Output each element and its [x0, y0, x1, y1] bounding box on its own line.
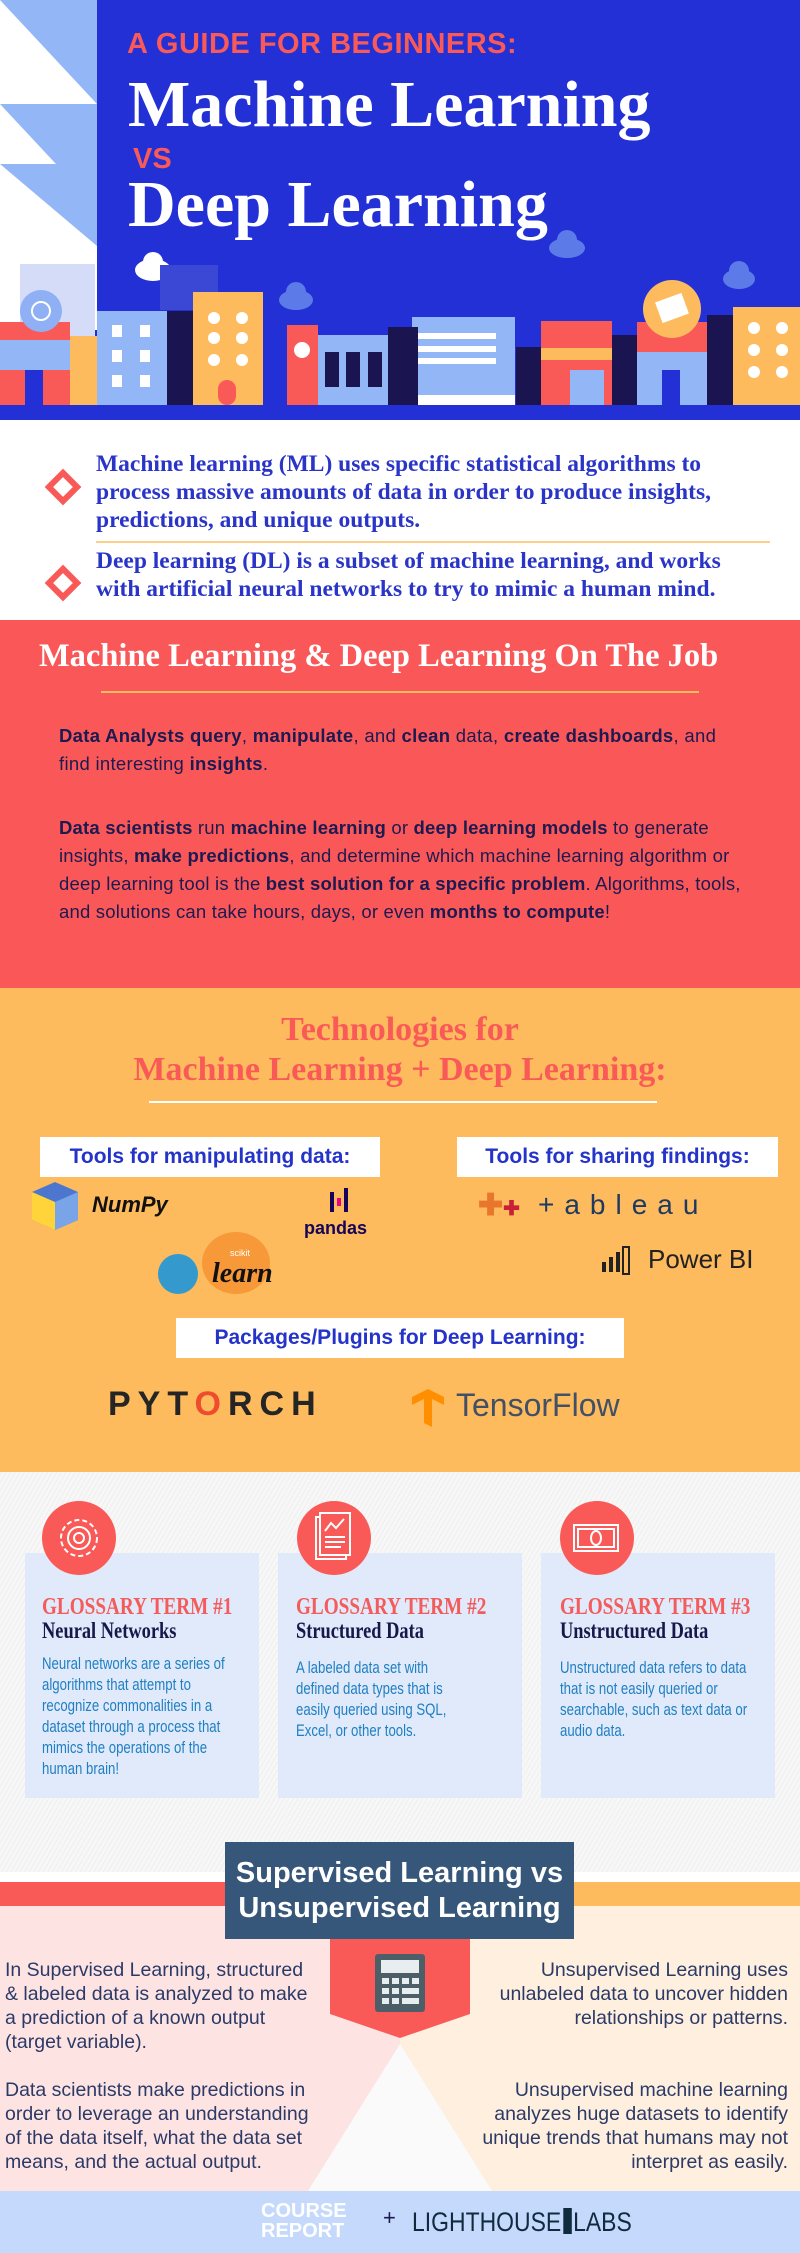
text: ML definition: Machine learning (ML) uses specific statistical algorithms to process massive amounts of data in order to produce insights, predictions, and unique outputs. [96, 451, 711, 533]
heading: supervised vs unsupervised [225, 1842, 574, 1939]
logo: scikit-learn: scikit [230, 1248, 250, 1258]
city skyline [0, 230, 800, 405]
text: DL definition: Deep learning (DL) is a subset of machine learning, and works with artificial neural networks to try to mimic a human mind. [96, 548, 721, 602]
term 1 text: Neural Networks [42, 1618, 176, 1643]
intro definitions [0, 420, 800, 620]
icon: money [560, 1501, 634, 1575]
label: deep learning packages [176, 1318, 624, 1358]
title line 2: Deep Learning [128, 168, 548, 241]
logo: course report: COURSE [261, 2200, 347, 2222]
panel: on the job [0, 620, 800, 988]
logo: numpy: NumPy [92, 1192, 168, 1217]
panel: glossary [0, 1472, 800, 1872]
icon: gear [42, 1501, 116, 1575]
label: manipulating data: Tools for manipulating data: [70, 1145, 350, 1168]
term 2 text: GLOSSARY TERM #2 [296, 1594, 486, 1620]
text: unsupervised: Unsupervised Learning uses unlabeled data to uncover hidden relationships or patterns. [500, 1959, 788, 2029]
card: structured data [278, 1553, 522, 1798]
icon: calculator badge [330, 1939, 470, 2038]
term 3 text: Unstructured data refers to data that is not easily queried or searchable, such as text data or audio data. [560, 1659, 747, 1740]
icon: diamond 1 [45, 469, 81, 505]
subtitle: A GUIDE FOR BEGINNERS: [127, 28, 517, 60]
term 1 text: Neural networks are a series of algorithms that attempt to recognize commonalities in a dataset through a process that mimics the operations of the human brain! [42, 1655, 225, 1778]
label: deep learning packages: Packages/Plugins for Deep Learning: [214, 1326, 586, 1349]
text: data scientists: Data scientists run machine learning or deep learning models to generate insights, make predictions, and determine which machine learning algorithm or deep learning tool is the best solution for a specific problem. Algorithms, tools, and solutions can take hours, days, or even months to compute! [59, 817, 741, 922]
logo: course report [261, 2200, 347, 2242]
label: manipulating data [40, 1137, 380, 1177]
icon: report [297, 1501, 371, 1575]
title: Machine Learning [128, 68, 650, 141]
logo: tableau [478, 1189, 708, 1222]
text: supervised: In Supervised Learning, structured & labeled data is analyzed to make a prediction of a known output (target variable). [5, 1959, 307, 2053]
logo: numpy [32, 1182, 169, 1230]
logo: tensorflow: TensorFlow [456, 1387, 620, 1423]
heading: Technologies for [281, 1011, 519, 1048]
term 1 text: GLOSSARY TERM #1 [42, 1594, 232, 1620]
term 3 text: GLOSSARY TERM #3 [560, 1594, 750, 1620]
label: sharing findings: Tools for sharing findings: [485, 1145, 750, 1168]
logo: lighthouse labs: LIGHTHOUSE LABS [412, 2207, 632, 2237]
footer logos [0, 2191, 800, 2253]
heading: Machine Learning & Deep Learning On The Job [39, 638, 718, 674]
logo: scikit-learn [158, 1232, 273, 1294]
term 1 text [42, 1594, 232, 1778]
text: unsupervised: Unsupervised machine learning analyzes huge datasets to identify unique trends that humans may not interpret as easily. [482, 2079, 788, 2173]
term 3 text: Unstructured Data [560, 1618, 708, 1643]
logo: scikit-learn: learn [212, 1258, 273, 1289]
heading [133, 1011, 667, 1088]
decorative triangles [0, 0, 97, 330]
term 2 text: A labeled data set with defined data types that is easily queried using SQL, Excel, or other tools. [296, 1659, 446, 1740]
logo: pandas [304, 1188, 367, 1238]
heading: Machine Learning + Deep Learning: [133, 1051, 667, 1088]
logo: tableau: +ableau [538, 1189, 708, 1220]
logo: pandas: pandas [304, 1218, 367, 1238]
vs: VS [133, 143, 172, 175]
panel: supervised vs unsupervised [0, 1882, 800, 2191]
logo: course report: REPORT [261, 2220, 344, 2242]
text: supervised: Data scientists make predictions in order to leverage an understanding of the data itself, what the data set means, and the actual output. [5, 2079, 309, 2173]
plus: + [383, 2205, 396, 2230]
logo: pytorch: PYTORCH [108, 1385, 323, 1423]
card: unstructured data [541, 1553, 775, 1798]
heading: supervised vs unsupervised: Unsupervised Learning [238, 1892, 561, 1924]
logo: power bi [602, 1244, 754, 1275]
text: unsupervised [482, 1959, 788, 2173]
logo: power bi: Power BI [648, 1244, 754, 1274]
text: supervised [5, 1959, 309, 2173]
logo: tableau: ✚✚ [478, 1189, 520, 1222]
term 3 text [560, 1594, 750, 1740]
card: neural networks [25, 1553, 259, 1798]
heading: supervised vs unsupervised: Supervised Learning vs [236, 1857, 563, 1889]
header banner [0, 0, 800, 420]
label: sharing findings [457, 1137, 778, 1177]
term 2 text [296, 1594, 486, 1740]
term 2 text: Structured Data [296, 1618, 424, 1643]
panel: technologies [0, 988, 800, 1472]
text: data analysts: Data Analysts query, manipulate, and clean data, create dashboards, and find interesting insights. [59, 725, 716, 774]
icon: diamond 2 [45, 565, 81, 601]
